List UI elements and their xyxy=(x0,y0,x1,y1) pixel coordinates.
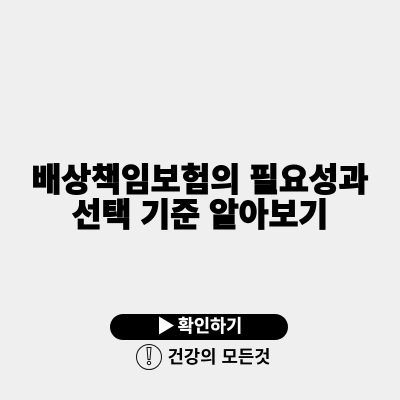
icon: exclamation circle xyxy=(136,344,162,370)
icon: play triangle xyxy=(159,316,174,334)
site name: 건강의 모든것 xyxy=(167,347,271,367)
title: 선택 기준 알아보기 xyxy=(72,197,328,233)
title: 배상책임보험의 필요성과 xyxy=(32,162,368,198)
button label: 확인하기 xyxy=(178,316,242,336)
button: confirm xyxy=(110,314,288,340)
title xyxy=(32,162,368,233)
